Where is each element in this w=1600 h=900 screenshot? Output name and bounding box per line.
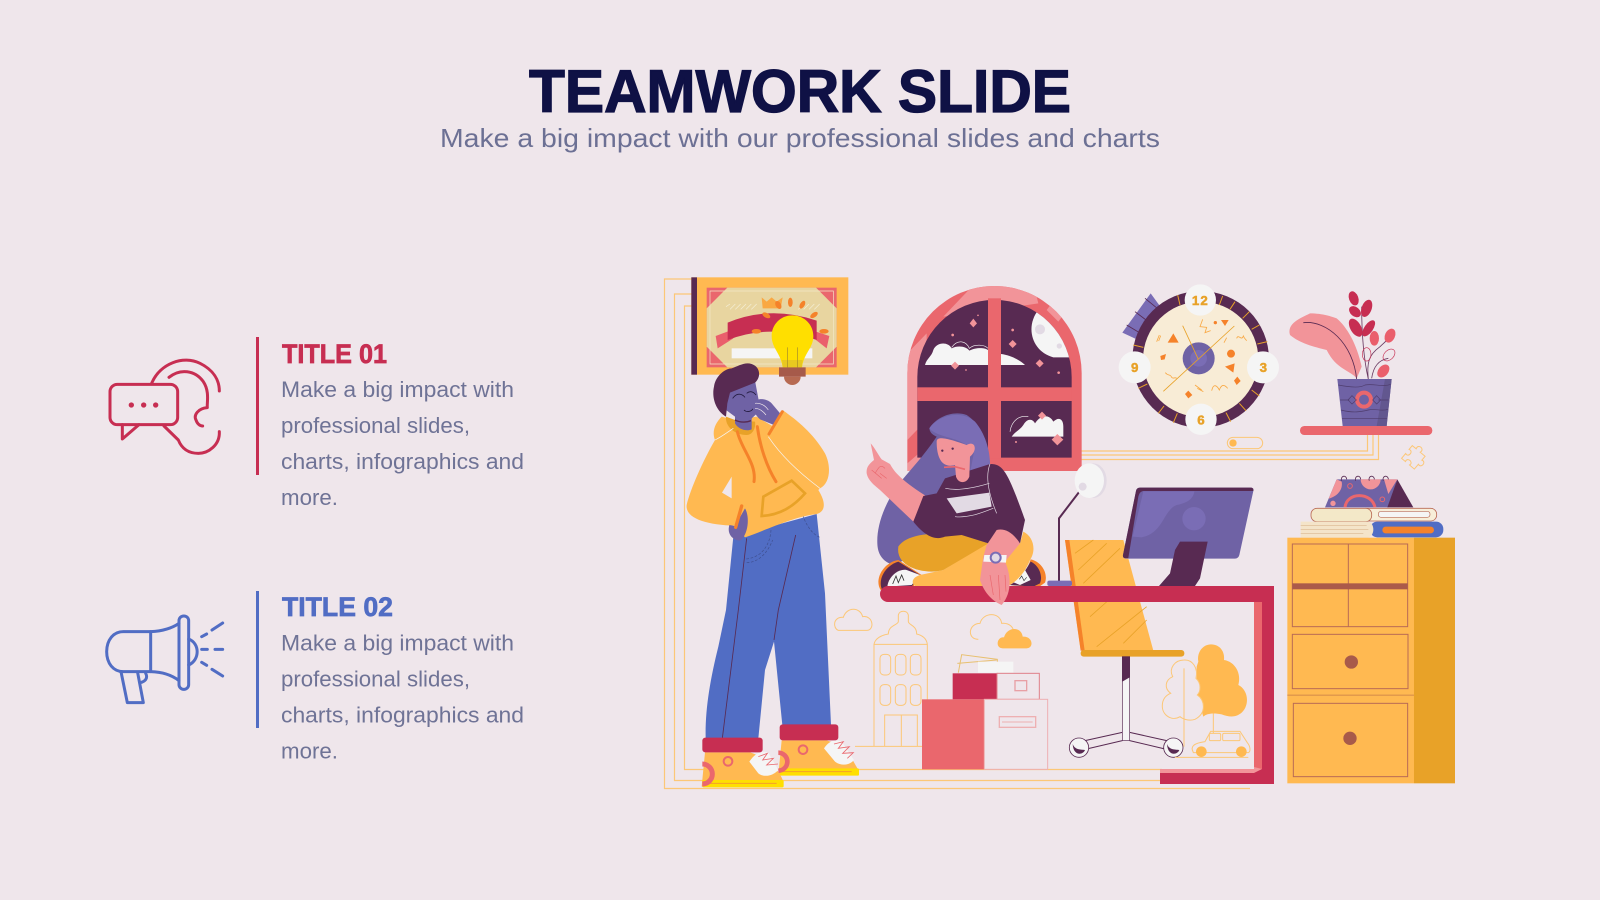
heading: title 02: TITLE 02 (282, 592, 393, 622)
body text: Make a big impact with (281, 630, 514, 656)
hand on chin (752, 399, 782, 434)
wall clock: 6 (1197, 412, 1205, 427)
body text (281, 630, 524, 764)
heading: title 01: TITLE 01 (282, 339, 387, 369)
legs (898, 532, 1033, 587)
woman's hand over desk (980, 530, 1020, 605)
jeans (706, 514, 831, 738)
desk body (880, 586, 1274, 784)
torso and arm (867, 438, 1025, 543)
trees and car outline (1162, 644, 1250, 757)
subtitle: Make a big impact with our professional slides and charts (440, 123, 1160, 153)
puzzle piece (1402, 442, 1431, 471)
window with night sky (907, 283, 1082, 473)
icon: speech bubble and ear (110, 360, 219, 453)
body text: professional slides, (281, 666, 470, 692)
wall clock: 9 (1131, 360, 1138, 375)
desk leg highlight (1160, 602, 1274, 784)
icon: light bulb (772, 315, 813, 385)
panel: title 01 (110, 337, 524, 510)
outline city, clouds, boxes (835, 609, 1048, 769)
woman on desk (867, 413, 1046, 591)
hand on hip (729, 506, 748, 541)
body text: charts, infographics and (281, 449, 524, 474)
wall clock: 12 (1192, 293, 1209, 308)
standing man (687, 363, 831, 738)
body text (281, 377, 524, 510)
office chair (1065, 540, 1184, 757)
panel: title 02 (107, 591, 524, 764)
desk lamp (1047, 463, 1107, 586)
computer monitor (1123, 488, 1253, 586)
framed certificate (691, 277, 848, 385)
title: TEAMWORK SLIDE (529, 58, 1071, 125)
potted plant on shelf (1289, 290, 1432, 435)
wall clock (1119, 284, 1279, 435)
accent bar (256, 591, 259, 728)
accent bar (256, 337, 259, 475)
man's shoes (702, 724, 859, 787)
face and hair (713, 363, 761, 430)
toggle switch (1227, 437, 1263, 449)
body text: charts, infographics and (281, 702, 524, 728)
body text: more. (281, 485, 338, 510)
icon: megaphone (107, 616, 223, 703)
desk inner panel (1254, 602, 1262, 769)
shoes (878, 559, 1046, 591)
stacked books and desk calendar (1301, 476, 1443, 537)
cabinet (1287, 538, 1455, 783)
illustration: teamwork office scene (664, 277, 1455, 788)
desk (880, 586, 1274, 784)
hair (877, 413, 990, 565)
hoodie (687, 411, 829, 537)
body text: professional slides, (281, 413, 470, 438)
body text: Make a big impact with (281, 377, 514, 402)
wall clock: 3 (1260, 360, 1267, 375)
body text: more. (281, 738, 338, 764)
frame lines (664, 279, 1378, 788)
